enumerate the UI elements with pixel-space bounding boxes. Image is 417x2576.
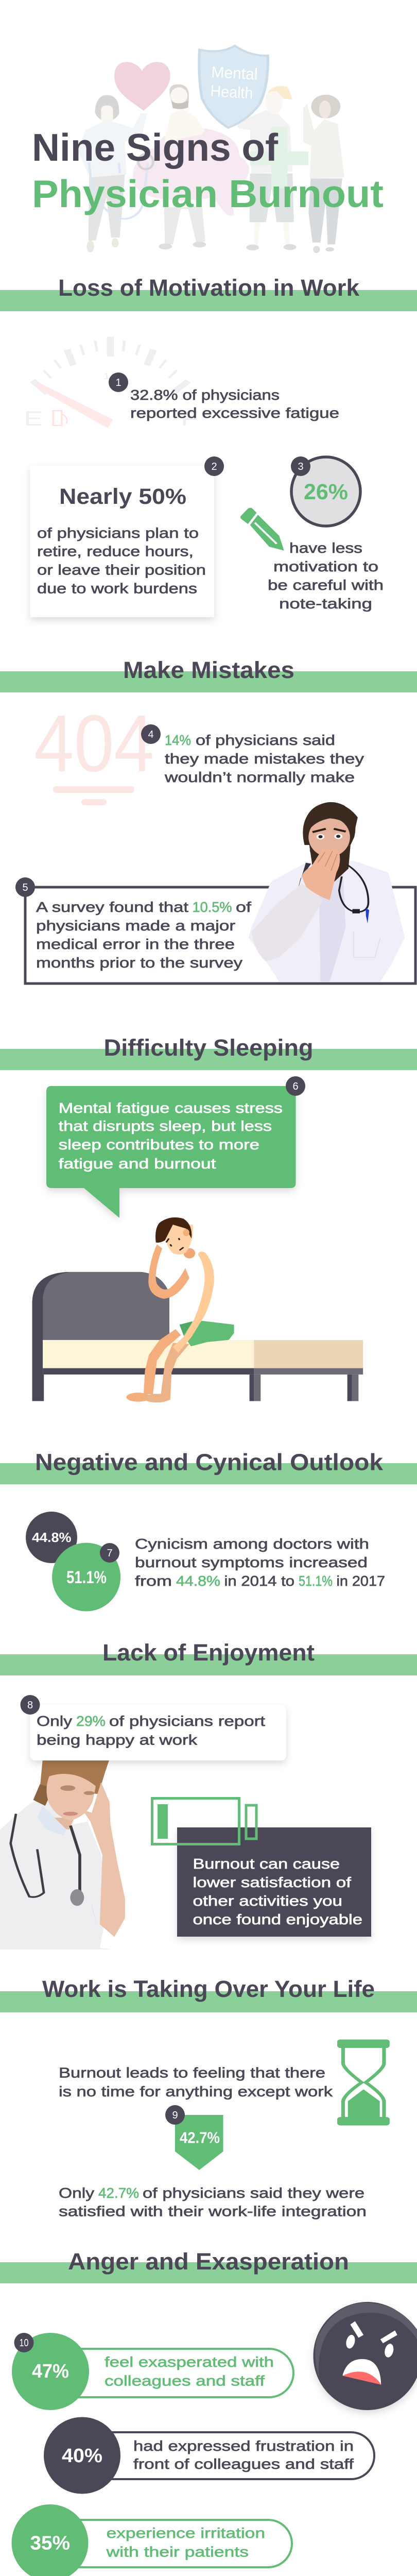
section heading: Make Mistakes [0, 657, 417, 692]
panel: burnout satisfaction box [152, 1798, 371, 1937]
badge 5 [15, 877, 35, 897]
pill text: had expressed frustration in [133, 2438, 354, 2454]
survey text: 10.5% [193, 899, 232, 915]
panel: 47% exasperated pill [12, 2333, 293, 2410]
card text: of physicians plan to [37, 525, 199, 541]
badge 6: 6 [292, 1081, 299, 1092]
stat heading: Nearly 50% [59, 484, 186, 509]
pill text: feel exasperated with [105, 2354, 274, 2370]
panel: only 29% card [21, 1695, 286, 1760]
bubble 44.8% [26, 1512, 77, 1563]
box text: other activities you [193, 1893, 342, 1909]
cynicism text: Cynicism among doctors with [135, 1536, 369, 1552]
satisfaction text [59, 2185, 367, 2219]
mistakes text: 14% [165, 732, 191, 748]
pill text: experience irritation [107, 2525, 265, 2541]
box text [193, 1856, 362, 1927]
badge 6 [286, 1076, 305, 1096]
badge 8 [21, 1695, 40, 1715]
note-taking text [268, 540, 384, 612]
circle 47%: 47% [32, 2361, 69, 2382]
survey text [36, 899, 251, 971]
panel: work-life stat [59, 2040, 390, 2219]
shield label [210, 63, 258, 102]
icon: fuel gauge: 1/ [103, 371, 113, 381]
note-taking text: have less [289, 540, 362, 556]
icon: pencil [240, 508, 284, 551]
panel: 404 mistakes stat [34, 699, 364, 805]
mistakes text [164, 732, 364, 785]
card text: or leave their position [37, 562, 206, 578]
section heading: Loss of Motivation in Work [0, 275, 417, 311]
badge 1: 1 [115, 377, 121, 388]
panel: 26% note-taking [240, 456, 384, 612]
badge 3: 3 [298, 461, 304, 472]
bubble 51.1% [52, 1543, 120, 1612]
bubble text: sleep contributes to more [59, 1137, 259, 1153]
cynicism text: 51.1% [299, 1573, 333, 1589]
icon: fuel gauge: E [24, 407, 43, 430]
badge 4 [141, 724, 161, 744]
circle stat 26% [291, 457, 360, 526]
icon: low battery [152, 1798, 256, 1844]
section heading: Anger and Exasperation: Anger and Exasperation [68, 2248, 349, 2275]
badge 1 [109, 372, 128, 392]
tag 42.7% [175, 2115, 223, 2170]
circle 47% [12, 2333, 89, 2410]
section heading: Negative and Cynical Outlook [0, 1449, 417, 1484]
section heading: Work is Taking Over Your Life: Work is Taking Over Your Life [42, 1976, 375, 2002]
no-time text [59, 2065, 333, 2099]
pill text [105, 2354, 274, 2388]
illustration: tired man sitting on bed [32, 1217, 363, 1402]
badge 9: 9 [172, 2110, 178, 2121]
circle stat 26%: 26% [304, 480, 348, 504]
header illustration: people with heart, shield, brain and cross [78, 46, 344, 253]
cynicism text: burnout symptoms increased [135, 1554, 368, 1570]
card text: being happy at work [37, 1732, 198, 1748]
fatigue text: reported excessive fatigue [130, 405, 339, 421]
circle 35%: 35% [30, 2533, 70, 2554]
photo: surprised doctor [249, 802, 405, 981]
cynicism text: 44.8% [176, 1573, 220, 1589]
badge 8: 8 [27, 1700, 33, 1711]
satisfaction text: of physicians said they were [143, 2185, 364, 2201]
circle 40%: 40% [62, 2445, 102, 2467]
photo: doctor with headache [0, 1760, 125, 1950]
no-time text: Burnout leads to feeling that there [59, 2065, 325, 2080]
title: Nine Signs of [32, 126, 279, 169]
bubble 51.1%: 51.1% [66, 1568, 107, 1587]
panel: fatigue gauge stat [24, 337, 339, 430]
mistakes text: they made mistakes they [165, 751, 364, 767]
card text: of physicians report [109, 1713, 265, 1729]
badge 7: 7 [107, 1548, 113, 1559]
section heading: Difficulty Sleeping: Difficulty Sleeping [104, 1035, 313, 1061]
icon: hourglass [337, 2040, 390, 2125]
badge 10 [14, 2333, 34, 2352]
section heading: Lack of Enjoyment: Lack of Enjoyment [102, 1639, 315, 1666]
icon: 404 error: 404 [34, 699, 154, 789]
survey text: months prior to the survey [36, 955, 242, 971]
panel: 35% irritation pill [11, 2504, 292, 2576]
pill text [106, 2525, 265, 2560]
pill text: with their patients [106, 2544, 249, 2560]
cynicism text [135, 1536, 385, 1589]
fatigue text: 32.8% of physicians [130, 387, 280, 403]
panel: cynicism stat [26, 1512, 385, 1612]
cynicism text: from [135, 1573, 172, 1589]
box text: Burnout can cause [193, 1856, 340, 1872]
card text: Only [37, 1713, 72, 1729]
panel: 40% frustration pill [44, 2417, 374, 2494]
panel: sleep speech bubble [46, 1076, 305, 1218]
bubble text: Mental fatigue causes stress [59, 1100, 283, 1116]
card text: 29% [76, 1713, 106, 1729]
badge 2: 2 [211, 461, 217, 472]
circle 40% [44, 2417, 120, 2494]
icon: angry face [314, 2302, 417, 2410]
bubble 44.8%: 44.8% [32, 1530, 71, 1545]
icon: fuel gauge: F [181, 407, 198, 430]
survey text: of [236, 899, 251, 915]
satisfaction text: Only [59, 2185, 94, 2201]
satisfaction text: satisfied with their work-life integration [59, 2203, 367, 2219]
card text: retire, reduce hours, [37, 543, 194, 560]
badge 5: 5 [22, 882, 28, 893]
badge 3 [291, 456, 310, 476]
badge 10: 10 [20, 2337, 29, 2349]
survey text: medical error in the three [36, 936, 235, 952]
pill text [133, 2438, 354, 2472]
note-taking text: note-taking [279, 596, 372, 612]
section heading: Work is Taking Over Your Life [0, 1976, 417, 2012]
badge 4: 4 [148, 729, 154, 740]
panel: survey box with doctor [15, 802, 415, 984]
section heading: Make Mistakes: Make Mistakes [123, 657, 294, 683]
cynicism text: in 2014 to [224, 1573, 294, 1589]
bubble text: that disrupts sleep, but less [59, 1118, 272, 1134]
survey text: A survey found that [36, 899, 188, 915]
title [32, 126, 384, 215]
no-time text: is no time for anything except work [59, 2083, 333, 2099]
note-taking text: motivation to [273, 558, 378, 574]
icon: fuel gauge [24, 337, 198, 430]
panel: nearly 50% card [30, 456, 224, 617]
satisfaction text: 42.7% [98, 2185, 139, 2201]
badge 7 [100, 1543, 119, 1563]
badge 2 [204, 456, 224, 476]
note-taking text: be careful with [268, 577, 384, 593]
pill text: colleagues and staff [105, 2373, 265, 2388]
shield label: Mental [211, 63, 258, 83]
section heading: Lack of Enjoyment [0, 1639, 417, 1675]
title: Physician Burnout [32, 172, 384, 215]
bubble text: fatigue and burnout [59, 1156, 216, 1172]
section heading: Difficulty Sleeping [0, 1035, 417, 1070]
bubble text [59, 1100, 283, 1172]
survey text: physicians made a major [36, 918, 235, 934]
section heading: Loss of Motivation in Work: Loss of Motivation in Work [58, 275, 360, 301]
section heading: Negative and Cynical Outlook: Negative and Cynical Outlook [35, 1449, 384, 1476]
badge 9 [165, 2105, 185, 2125]
card text [37, 525, 206, 597]
pill text: front of colleagues and staff [133, 2456, 354, 2472]
fatigue text [130, 387, 339, 421]
tag 42.7%: 42.7% [180, 2129, 220, 2146]
card text [37, 1713, 265, 1748]
shield label: Health [210, 82, 253, 102]
section heading: Anger and Exasperation [0, 2248, 417, 2283]
mistakes text: wouldn’t normally make [164, 769, 355, 785]
mistakes text: of physicians said [196, 732, 335, 748]
card text: due to work burdens [37, 580, 197, 597]
box text: lower satisfaction of [193, 1874, 351, 1890]
cynicism text: in 2017 [337, 1573, 385, 1589]
box text: once found enjoyable [193, 1911, 362, 1927]
circle 35% [11, 2504, 89, 2576]
